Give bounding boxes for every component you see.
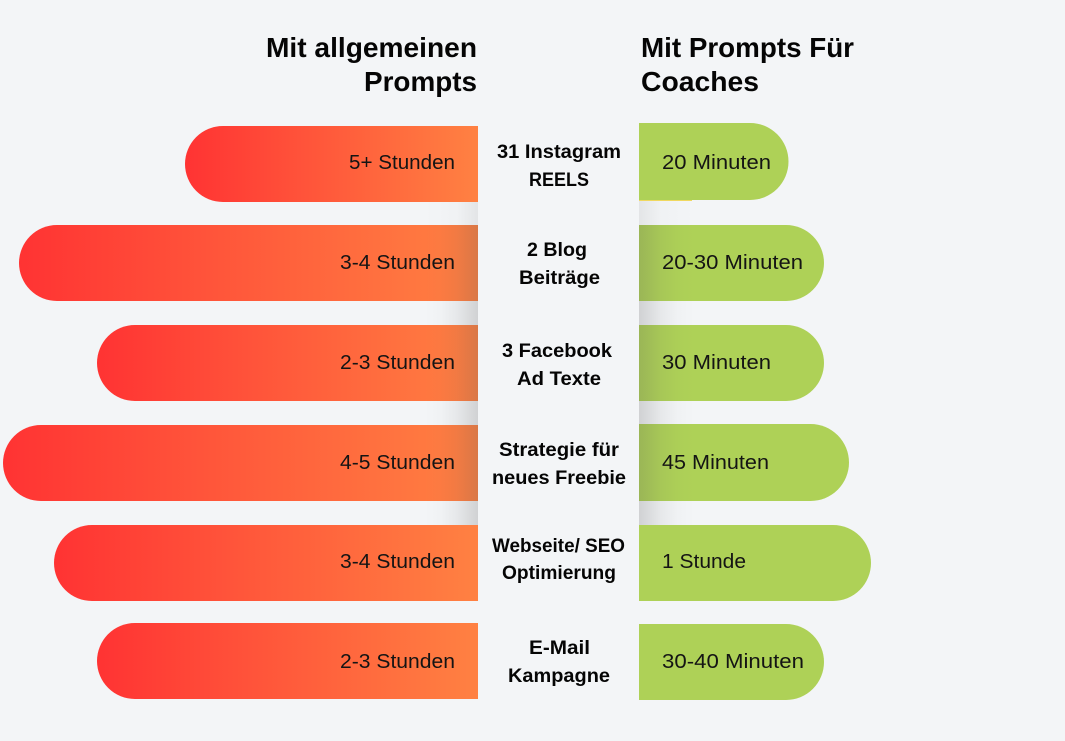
label: 3 Facebook Ad Texte <box>502 341 612 390</box>
bar: allgemein 4-5 Stunden <box>3 425 478 501</box>
bar: Coaches 30-40 Minuten <box>639 624 824 700</box>
row 3: 3 Facebook Ad Texte <box>97 325 824 401</box>
row 1: 31 Instagram REELS <box>185 123 788 202</box>
heading: Mit allgemeinen Prompts: Prompts <box>364 66 477 97</box>
label: Strategie für neues Freebie: neues Freebie <box>492 468 626 489</box>
bar: allgemein 3-4 Stunden: 3-4 Stunden <box>340 252 455 274</box>
bar: Coaches 30 Minuten <box>639 325 824 401</box>
bar: allgemein 3-4 Stunden: 3-4 Stunden <box>340 551 455 573</box>
bar: allgemein 2-3 Stunden <box>97 325 478 401</box>
bar: Coaches 20-30 Minuten <box>639 225 824 301</box>
label: E-Mail Kampagne: E-Mail <box>529 638 590 659</box>
label: Webseite/ SEO Optimierung: Webseite/ SEO <box>492 536 625 557</box>
bar: Coaches 45 Minuten: 45 Minuten <box>662 452 769 474</box>
heading: Mit Prompts Für Coaches <box>641 32 854 97</box>
bar: Coaches 20 Minuten <box>639 123 788 201</box>
label: 3 Facebook Ad Texte: Ad Texte <box>517 369 601 390</box>
heading: Mit allgemeinen Prompts: Mit allgemeinen <box>266 32 477 63</box>
row 4: Strategie für neues Freebie <box>3 424 849 501</box>
label: 2 Blog Beiträge: Beiträge <box>519 268 600 289</box>
heading: Mit Prompts Für Coaches: Mit Prompts Für <box>641 32 854 63</box>
bar: Coaches 20 Minuten: 20 Minuten <box>662 152 771 174</box>
bar: Coaches 20-30 Minuten: 20-30 Minuten <box>662 252 803 274</box>
row 6: E-Mail Kampagne <box>97 623 824 700</box>
label: 2 Blog Beiträge: 2 Blog <box>527 240 587 261</box>
bar: Coaches 30 Minuten: 30 Minuten <box>662 352 771 374</box>
label: 31 Instagram REELS <box>497 142 621 191</box>
bar: Coaches 1 Stunde: 1 Stunde <box>662 551 746 573</box>
heading: Mit Prompts Für Coaches: Coaches <box>641 66 759 97</box>
row 5: Webseite/ SEO Optimierung <box>54 525 871 601</box>
bar: allgemein 5+ Stunden <box>185 126 478 202</box>
heading: Mit allgemeinen Prompts <box>266 32 477 97</box>
label: Webseite/ SEO Optimierung: Optimierung <box>502 563 616 584</box>
bar: Coaches 45 Minuten <box>639 424 849 501</box>
label: 3 Facebook Ad Texte: 3 Facebook <box>502 341 612 362</box>
row 2: 2 Blog Beiträge <box>19 225 824 301</box>
bar: allgemein 4-5 Stunden: 4-5 Stunden <box>340 452 455 474</box>
label: E-Mail Kampagne <box>508 638 610 687</box>
label: Webseite/ SEO Optimierung <box>492 536 625 584</box>
bar: Coaches 30-40 Minuten: 30-40 Minuten <box>662 651 804 673</box>
bar: allgemein 5+ Stunden: 5+ Stunden <box>349 152 455 174</box>
bar: allgemein 2-3 Stunden: 2-3 Stunden <box>340 352 455 374</box>
bar: Coaches 1 Stunde <box>639 525 871 601</box>
label: Strategie für neues Freebie <box>492 440 626 489</box>
label: 31 Instagram REELS: REELS <box>529 170 589 191</box>
label: E-Mail Kampagne: Kampagne <box>508 666 610 687</box>
bar: allgemein 2-3 Stunden <box>97 623 478 699</box>
label: 2 Blog Beiträge <box>519 240 600 289</box>
shadow: gaps between bars <box>425 200 694 525</box>
bar: allgemein 3-4 Stunden <box>19 225 478 301</box>
bar: allgemein 3-4 Stunden <box>54 525 478 601</box>
bar: allgemein 2-3 Stunden: 2-3 Stunden <box>340 651 455 673</box>
label: Strategie für neues Freebie: Strategie für <box>499 440 620 461</box>
label: 31 Instagram REELS: 31 Instagram <box>497 142 621 163</box>
